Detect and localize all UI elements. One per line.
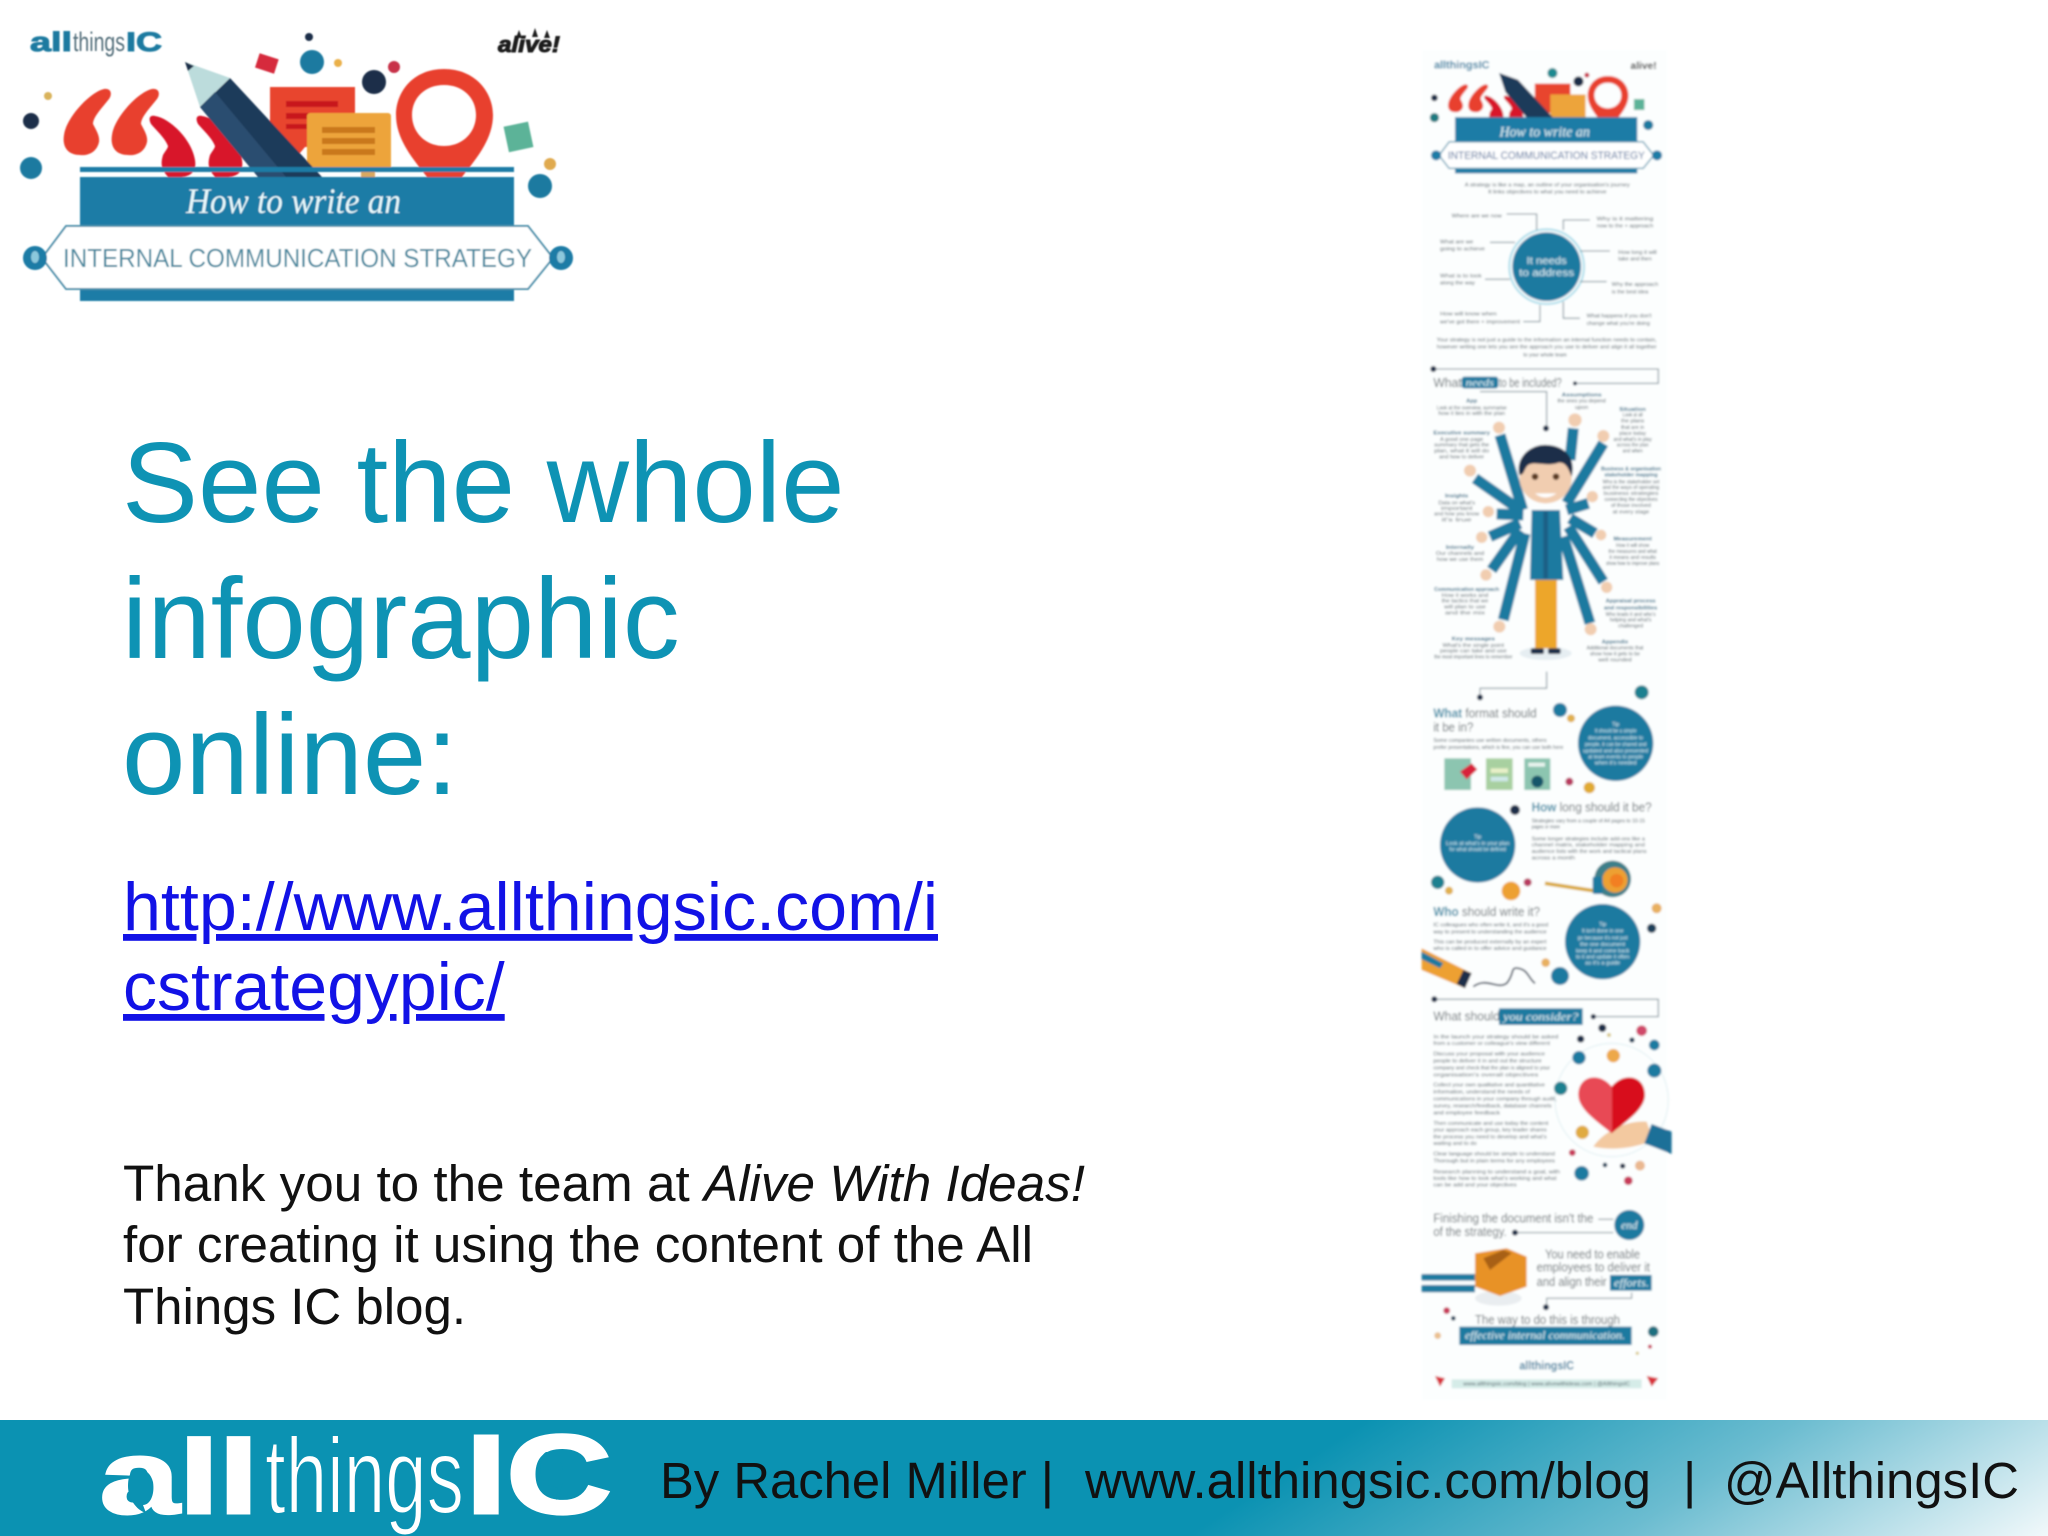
- thumbnail section: it needs to address: to your whole team: [1523, 353, 1567, 359]
- circle: it needs to address: [1509, 229, 1584, 304]
- consideration paragraphs: from a customer or colleague's view different: [1433, 1041, 1550, 1047]
- thumbnail section: it needs to address: Why is it mattering: [1597, 217, 1653, 223]
- arm labels right: Situation: [1619, 407, 1647, 413]
- arm labels left: how we use them: [1437, 557, 1484, 563]
- circle: tip 3: [1565, 904, 1640, 979]
- block: who should write it: IC colleagues who often write it, and it's a good: [1433, 923, 1548, 929]
- header graphic: how to write an internal communication strategy: [20, 27, 573, 301]
- circle: tip 3: Tip: [1599, 922, 1606, 928]
- circle: tip 1: Tip: [1612, 722, 1619, 728]
- arm labels left: Key messages: [1452, 637, 1495, 643]
- arm labels right: and when: [1623, 448, 1643, 454]
- block: what format should it be in: Some companies use written documents, others: [1433, 738, 1547, 744]
- arm labels left: people can take and use: [1440, 649, 1507, 655]
- block: how long should it be: Some longer strategies include add-ons like a: [1532, 836, 1646, 842]
- footer logo: allthingsIC: things: [265, 1415, 464, 1536]
- circle: tip 2: for what should be defined: [1449, 847, 1506, 853]
- section heading: you consider?: [1502, 1010, 1578, 1024]
- arm labels left: App: [1466, 398, 1478, 404]
- arm labels right: it means and results: [1609, 555, 1656, 561]
- block: how long should it be: [1532, 801, 1652, 861]
- thumbnail section: it needs to address: It links objectives to what you need to achieve: [1488, 190, 1606, 196]
- consideration paragraphs: Discuss your proposal with your audience: [1433, 1052, 1545, 1058]
- circle: tip 3: the one document: [1580, 942, 1626, 948]
- heading: see the whole infographic online: infographic: [122, 556, 680, 683]
- arm labels left: it's true: [1442, 518, 1472, 524]
- arm labels left: What's the single point: [1442, 643, 1505, 649]
- arm labels left: Executive summary: [1433, 430, 1491, 436]
- section heading with pill: What: [1433, 376, 1462, 390]
- thumbnail header: [1430, 59, 1662, 173]
- block: how long should it be: pages or more: [1532, 825, 1560, 831]
- footer byline: @AllthingsIC: [1724, 1452, 2019, 1509]
- circle: tip 1: people, it can be shared and: [1585, 742, 1647, 748]
- consideration paragraphs: can be add and your objectives: [1433, 1183, 1517, 1189]
- thumbnail footer bar: www.allthingsic.com/blog | www.alivewithideas.com | @AllthingsIC: [1462, 1382, 1630, 1388]
- arm labels left: A good one-page: [1440, 437, 1483, 443]
- logo: allthingsIC small: IC: [126, 27, 162, 57]
- arm labels right: well rounded: [1597, 658, 1632, 664]
- arm labels right: business strategies: [1603, 491, 1659, 497]
- block: how long should it be: across a month: [1532, 855, 1575, 861]
- thumbnail section: it needs to address: Your strategy is not just a guide to the information an internal function needs to contain,: [1437, 338, 1657, 344]
- block: who should write it: This can be produced externally by an expert: [1433, 939, 1547, 945]
- thumbnail section: it needs to address: What happens if you don't: [1587, 314, 1652, 320]
- text: you need to enable: [1537, 1247, 1652, 1310]
- consideration paragraphs: waiting and to do: [1432, 1141, 1477, 1147]
- arm labels right: and responsibilities: [1604, 605, 1657, 611]
- footer byline: |: [1683, 1452, 1696, 1509]
- block: who should write it: way to present to understanding the audience: [1432, 929, 1547, 935]
- thumbnail section: it needs to address: Why the approach: [1612, 282, 1658, 288]
- icons: document formats: [1444, 758, 1550, 790]
- circle: tip 2: Look at what's in your plan: [1446, 841, 1509, 847]
- text: you need to enable: and align their: [1537, 1275, 1607, 1289]
- logo: allthingsIC small: [30, 27, 162, 57]
- thumbnail background: [1422, 50, 1667, 1400]
- section heading with pill: [1430, 366, 1658, 431]
- block: how long should it be: Strategies vary from a couple of A4 pages to 10-15: [1532, 819, 1645, 825]
- thumbnail header: How to write an: [1499, 124, 1590, 140]
- heading: see the whole infographic online: online:: [122, 692, 458, 819]
- circle: tip 2: [1440, 807, 1515, 883]
- footer logo: allthingsIC: [100, 1411, 612, 1536]
- arm labels left: important: [1441, 506, 1473, 512]
- consideration paragraphs: organisation's overall objectives: [1433, 1073, 1539, 1079]
- thumbnail footer logo: allthingsIC: [1519, 1358, 1574, 1372]
- text block: thank you: [123, 1155, 1085, 1335]
- text: effective internal communication: [1434, 1307, 1659, 1355]
- arm labels right: show how it gets to be: [1590, 652, 1640, 658]
- consideration paragraphs: Thorough but in plain terms for any employees: [1433, 1158, 1555, 1164]
- logo: allthingsIC small: things: [73, 27, 125, 57]
- circle: tip 1: document, accessible to: [1588, 735, 1643, 741]
- arm labels right: the ones you depend: [1557, 398, 1606, 404]
- arm labels right: challenged: [1618, 624, 1643, 630]
- arm labels right: Who is the stakeholder set: [1603, 479, 1660, 485]
- block: who should write it: Who should write it?: [1433, 905, 1540, 919]
- arm labels left: Our channels and: [1436, 551, 1484, 557]
- thumbnail footer bar: [1435, 1376, 1658, 1388]
- consideration paragraphs: and employee feedback: [1433, 1110, 1500, 1116]
- circle: it needs to address: to address: [1519, 268, 1574, 279]
- link: infographic url: cstrategypic/: [123, 949, 505, 1025]
- footer logo: allthingsIC: all: [100, 1420, 258, 1536]
- consideration paragraphs: company and check that the plan is aligned to your: [1433, 1065, 1550, 1071]
- circle: tip 1: It should be a simple: [1595, 729, 1637, 735]
- consideration paragraphs: survey, research/feedback, database channels: [1433, 1104, 1552, 1110]
- banner: how to write an: [80, 167, 514, 301]
- arm labels left: plan, what it will do: [1434, 448, 1489, 454]
- arm labels left: the most important lines to remember: [1434, 654, 1513, 660]
- arm labels left: Data on what's: [1438, 500, 1475, 506]
- thumbnail section: it needs to address: change what you're doing: [1587, 321, 1650, 327]
- thumbnail header: alive!: [1631, 61, 1657, 72]
- text: you need to enable: You need to enable: [1545, 1247, 1640, 1261]
- arm labels right: Assumptions: [1562, 393, 1602, 399]
- arm labels right: How it will show: [1616, 543, 1650, 549]
- thumbnail section: what should you consider: [1422, 1008, 1672, 1388]
- connector line: [1434, 999, 1658, 1017]
- consideration paragraphs: In the launch your strategy should be asked: [1433, 1034, 1558, 1040]
- circle: tip 1: when it's needed: [1595, 761, 1637, 767]
- block: how long should it be: audience lists with the work and tactical plans: [1532, 849, 1647, 855]
- thumbnail header: allthingsIC: [1434, 59, 1489, 71]
- label: internal communication strategy: [23, 226, 573, 289]
- logo: alive: alive!: [498, 32, 560, 57]
- footer byline: [660, 1452, 2019, 1509]
- consideration paragraphs: people to deliver it in and out the structure: [1433, 1058, 1542, 1064]
- arm labels right: connecting the objectives: [1604, 497, 1658, 503]
- arm labels right: Measurement: [1613, 537, 1652, 543]
- arm labels right: across the plan: [1617, 443, 1648, 449]
- text block: thank you: Things IC blog.: [123, 1278, 466, 1335]
- thumbnail section: it needs to address: going to achieve: [1440, 247, 1485, 253]
- thumbnail: full infographic preview: [1422, 50, 1672, 1400]
- thumbnail section: format, length, author: [1422, 685, 1662, 1017]
- text: finishing the document: [1433, 1210, 1644, 1240]
- circle: tip 3: It isn't done in one: [1582, 929, 1624, 935]
- arm labels right: and the ways of operating: [1603, 485, 1659, 491]
- heading: see the whole infographic online: See the whole: [122, 420, 845, 547]
- thumbnail section: it needs to address: now to the + approach: [1597, 224, 1653, 230]
- consideration paragraphs: the process you need to develop and what's: [1433, 1134, 1547, 1140]
- section heading with pill: to be included?: [1499, 376, 1562, 390]
- thumbnail section: it needs to address: along the way: [1440, 280, 1475, 286]
- arm labels right: the plans: [1621, 419, 1644, 425]
- arm labels right: and what's in play: [1613, 437, 1652, 443]
- icon: pencil: [185, 62, 322, 177]
- consideration paragraphs: communications in your company through audit,: [1433, 1097, 1557, 1103]
- text block: thank you: for creating it using the content of the All: [123, 1216, 1033, 1273]
- block: what format should it be in: prefer presentations, which is fine, you can use both here: [1433, 745, 1563, 751]
- block: what format should it be in: [1433, 707, 1563, 751]
- icon: speech bubbles: [270, 87, 391, 177]
- arm labels left: will plan to use: [1443, 604, 1486, 610]
- arm labels right: of those involved: [1611, 503, 1651, 509]
- footer bar: [0, 1411, 2048, 1536]
- arm labels left: Look at the overview, summarise: [1437, 405, 1507, 411]
- illustration: person with many arms: [1464, 413, 1612, 660]
- arm labels right: Look at all: [1623, 413, 1643, 419]
- illustration: heart in hand with icons: [1554, 1024, 1672, 1185]
- arm labels right: show how to improve plans: [1606, 561, 1659, 567]
- thumbnail section: it needs to address: Where are we now: [1452, 213, 1503, 219]
- thumbnail section: it needs to address: we've got there + improvement: [1439, 319, 1520, 325]
- consideration paragraphs: [1432, 1034, 1560, 1189]
- text: effective internal communication: The way to do this is through: [1475, 1313, 1620, 1327]
- block: what format should it be in: it be in?: [1433, 721, 1473, 735]
- arm labels right: helping and what's: [1610, 618, 1652, 624]
- arm labels left: and how to deliver: [1439, 454, 1484, 460]
- label: internal communication strategy: INTERNAL COMMUNICATION STRATEGY: [63, 243, 532, 273]
- block: what format should it be in: What format should: [1433, 707, 1537, 721]
- link: infographic url: http://www.allthingsic.com/i: [123, 869, 938, 945]
- thumbnail section: it needs to address: [1437, 183, 1658, 359]
- thumbnail section: it needs to address: take and then: [1618, 257, 1652, 263]
- circle: tip 2: Tip: [1474, 834, 1481, 840]
- dots: [1431, 685, 1662, 985]
- circle: tip 3: keep it and come back: [1576, 949, 1630, 955]
- text: effective internal communication: effective internal communication.: [1465, 1328, 1625, 1342]
- arm labels right: Who leads it and who's: [1606, 612, 1656, 618]
- arm labels right: place today: [1619, 431, 1646, 437]
- arm labels right: Appendix: [1602, 640, 1629, 646]
- consideration paragraphs: Research planning to understand a goal, with: [1433, 1169, 1560, 1175]
- consideration paragraphs: information, understand the needs of: [1433, 1089, 1530, 1095]
- consideration paragraphs: your approach each group, key leader shares: [1433, 1128, 1547, 1134]
- icon: tape measure: [1545, 861, 1631, 897]
- block: who should write it: who is called in to offer advice and guidance: [1432, 946, 1547, 952]
- logo: allthingsIC small: all: [30, 27, 72, 57]
- section heading: [1433, 1008, 1596, 1025]
- text: you need to enable: employees to deliver it: [1537, 1261, 1650, 1275]
- arm labels left: the tactics that we: [1442, 599, 1488, 605]
- footer byline: By Rachel Miller |: [660, 1452, 1054, 1509]
- text: finishing the document: end: [1621, 1220, 1638, 1232]
- arm labels right: [1557, 393, 1661, 664]
- icon: location pin: [396, 69, 493, 177]
- arm labels right: Business & organisation: [1601, 467, 1661, 473]
- thumbnail section: it needs to address: What is to look: [1440, 273, 1482, 279]
- arm labels left: and the mix: [1445, 610, 1485, 616]
- text: finishing the document: Finishing the document isn't the: [1433, 1212, 1593, 1226]
- consideration paragraphs: Then communicate and use today the content: [1433, 1121, 1549, 1127]
- arm labels right: Additional documents that: [1587, 646, 1644, 652]
- arm labels left: [1433, 398, 1513, 660]
- arm labels left: summary that gets the: [1434, 443, 1489, 449]
- thumbnail section: it needs to address: How will know when: [1440, 312, 1497, 318]
- circle: tip 1: at team events to people: [1588, 755, 1643, 761]
- consideration paragraphs: Clear language should be simple to understand: [1433, 1152, 1555, 1158]
- thumbnail section: it needs to address: What are we: [1440, 239, 1473, 245]
- block: how long should it be: How long should it be?: [1532, 801, 1652, 815]
- arm labels right: that are in: [1621, 425, 1644, 431]
- arm labels right: the measures and what: [1608, 549, 1657, 555]
- arm labels left: Insights: [1445, 494, 1468, 500]
- banner: how to write an: How to write an: [185, 181, 401, 221]
- arm labels left: Internally: [1446, 545, 1475, 551]
- heading: see the whole infographic online: [122, 420, 845, 819]
- circle: tip 3: to it and update it often: [1576, 955, 1629, 961]
- footer byline: www.allthingsic.com/blog: [1084, 1452, 1651, 1509]
- text: finishing the document: of the strategy.: [1433, 1225, 1507, 1239]
- arm labels right: stakeholder mapping: [1604, 473, 1658, 479]
- block: how long should it be: channel matrix, stakeholder mapping and: [1532, 843, 1645, 849]
- footer logo: allthingsIC: IC: [466, 1411, 612, 1536]
- thumbnail section: it needs to address: however writing one lets you see the approach you use to deliver and align it all together: [1437, 344, 1657, 350]
- arm labels right: at every stage: [1613, 509, 1649, 515]
- arm labels left: how it ties in with the plan: [1438, 411, 1505, 417]
- thumbnail section: it needs to address: A strategy is like a map, an outline of your organisation's journey: [1465, 183, 1630, 189]
- consideration paragraphs: Collect your own qualitative and quantitative: [1433, 1083, 1545, 1089]
- decorative dots: [20, 33, 556, 198]
- block: who should write it: [1432, 905, 1548, 952]
- thumbnail section: it needs to address: How long it will: [1618, 250, 1657, 256]
- circle: tip 1: [1578, 706, 1653, 781]
- circle: tip 3: go because it's not just: [1578, 935, 1628, 941]
- section heading with pill: needs: [1466, 378, 1494, 389]
- text block: thank you: Thank you to the team at Alive With Ideas!: [123, 1155, 1085, 1212]
- circle: it needs to address: It needs: [1527, 256, 1567, 267]
- circle: tip 1: updated and also presented: [1583, 749, 1648, 755]
- thumbnail header: INTERNAL COMMUNICATION STRATEGY: [1448, 150, 1646, 162]
- icon: pen with squiggle: [1422, 948, 1535, 988]
- arm labels left: How it works and: [1442, 593, 1488, 599]
- arm labels left: Communication approach: [1434, 587, 1500, 593]
- text: you need to enable: efforts.: [1614, 1278, 1649, 1290]
- link: infographic url: [123, 869, 938, 1025]
- arm labels right: upon: [1575, 405, 1588, 411]
- icon: opening and closing quote marks: [64, 89, 242, 177]
- consideration paragraphs: tools like how to look what's working and what: [1433, 1176, 1557, 1182]
- circle: tip 3: as it's a guide: [1585, 961, 1620, 967]
- thumbnail section: what needs to be included: [1430, 366, 1661, 697]
- arm labels left: and how you know: [1434, 512, 1480, 518]
- icon: cardboard box with stripes: [1422, 1248, 1527, 1306]
- thumbnail section: it needs to address: is the best idea: [1612, 289, 1649, 295]
- arm labels right: Appraisal process: [1606, 598, 1656, 604]
- section heading: What should: [1433, 1010, 1500, 1024]
